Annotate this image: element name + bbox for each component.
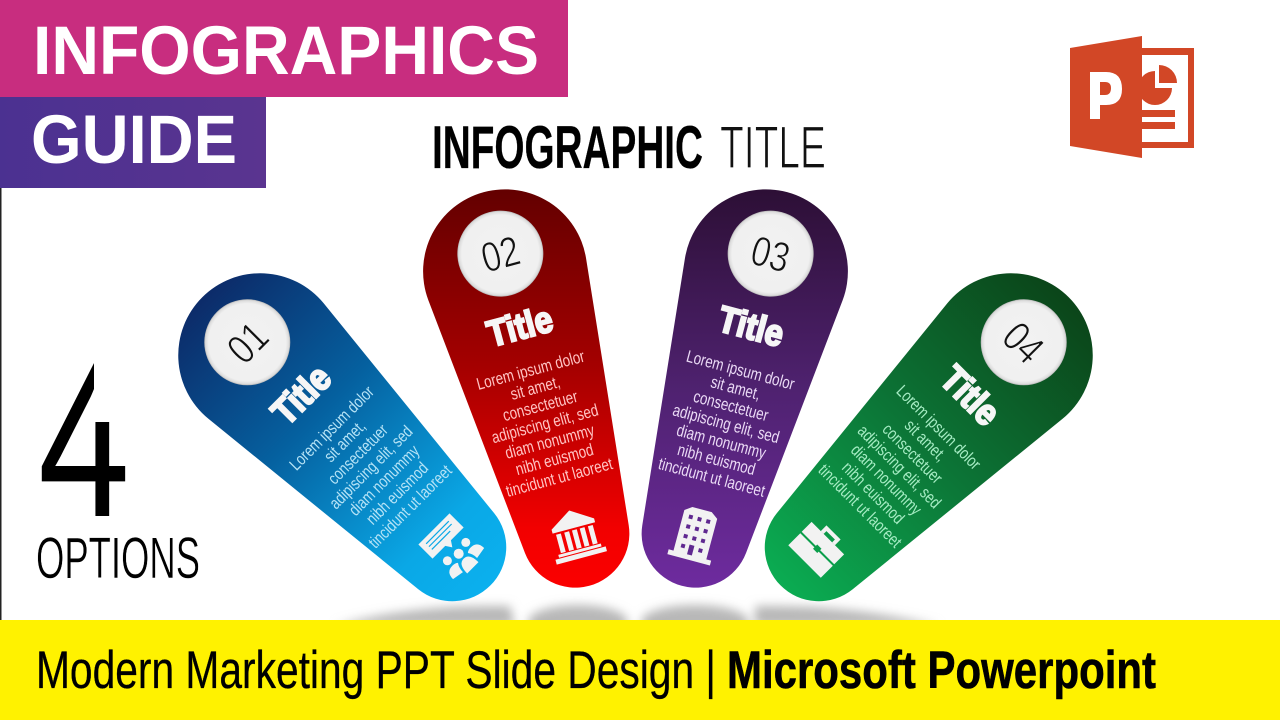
card body text: Lorem ipsum dolor <box>684 347 796 394</box>
big number: 4 options: 4 <box>38 316 130 564</box>
heading: infographic title: TITLE <box>720 114 826 181</box>
big number: 4 options: OPTIONS <box>36 526 200 591</box>
panel: option 02 <box>405 171 669 607</box>
big number: 4 options <box>36 316 200 591</box>
card body text: Lorem ipsum dolor <box>475 347 587 394</box>
icon: briefcase <box>788 516 850 578</box>
card body text: nibh euismod <box>363 459 432 529</box>
card body text: nibh euismod <box>514 441 596 480</box>
card body text: Lorem ipsum dolor <box>892 382 984 474</box>
left edge line <box>0 188 2 620</box>
card title: Title <box>714 298 788 355</box>
icon: audience with speech bubble <box>418 513 488 583</box>
number badge 01: 01 <box>218 313 278 373</box>
card body text: sit amet, <box>709 373 762 404</box>
card body text: consectetuer <box>878 420 946 488</box>
card body <box>723 239 1127 643</box>
card title: Title <box>483 298 557 355</box>
card body text: nibh euismod <box>675 441 757 480</box>
card body text: tincidunt ut laoreet <box>656 455 768 501</box>
card body text: tincidunt ut laoreet <box>365 461 456 552</box>
subtitle: guide banner: GUIDE <box>31 101 237 178</box>
icon: bank building <box>544 504 607 565</box>
card body text: tincidunt ut laoreet <box>504 455 615 501</box>
card body <box>405 171 669 607</box>
number badge 03 <box>718 201 823 306</box>
card body text: diam nonummy <box>674 421 768 463</box>
card body text: diam nonummy <box>503 421 597 463</box>
card title: Title <box>264 357 339 433</box>
card shadows <box>335 605 940 639</box>
icon: powerpoint logo <box>1070 36 1194 158</box>
footer text: Microsoft Powerpoint <box>727 641 1156 700</box>
card body text: tincidunt ut laoreet <box>814 461 906 552</box>
card body text: Lorem ipsum dolor <box>286 383 378 474</box>
card body text: diam nonummy <box>345 442 424 520</box>
panel: option 03 <box>602 171 866 607</box>
card body <box>144 239 548 643</box>
number badge 04 <box>963 281 1085 403</box>
card body text: nibh euismod <box>838 458 908 528</box>
number badge 02: 02 <box>476 226 525 282</box>
card body text: diam nonummy <box>847 441 925 519</box>
card body text: adipiscing elit, sed <box>326 422 417 513</box>
number badge 02 <box>448 201 553 306</box>
subtitle: guide banner <box>0 97 266 188</box>
panel: option 01 <box>144 239 548 643</box>
panel: option 04 <box>723 239 1127 643</box>
card body text: sit amet, <box>509 373 562 404</box>
card body text: adipiscing elit, sed <box>854 422 944 512</box>
card body text: consectetuer <box>324 421 392 489</box>
heading: infographic title: INFOGRAPHIC <box>432 114 703 181</box>
number badge 04: 04 <box>993 313 1053 373</box>
card body <box>602 171 866 607</box>
number badge 03: 03 <box>746 226 795 282</box>
icon: office tower <box>667 504 723 566</box>
card title: Title <box>933 358 1008 433</box>
card body text: sit amet, <box>900 416 950 466</box>
card body text: adipiscing elit, sed <box>490 401 600 448</box>
number badge 01 <box>186 281 308 403</box>
card body text: adipiscing elit, sed <box>671 401 781 448</box>
footer bar <box>0 620 1280 720</box>
footer text: Modern Marketing PPT Slide Design | <box>36 641 716 700</box>
card body text: consectetuer <box>691 387 770 426</box>
title: infographics banner: INFOGRAPHICS <box>33 12 539 89</box>
card body text: consectetuer <box>501 387 580 426</box>
card body text: sit amet, <box>321 417 370 466</box>
